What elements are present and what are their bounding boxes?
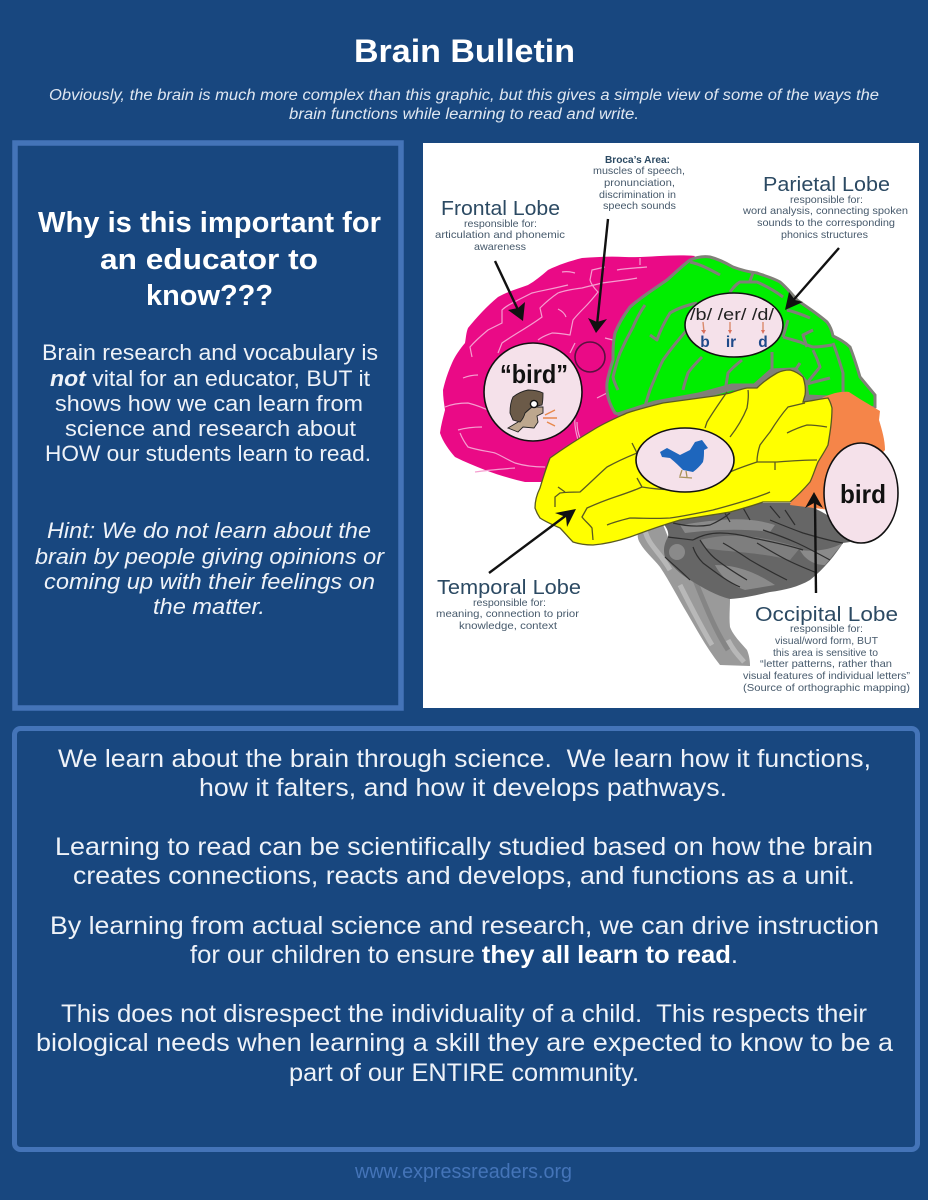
label: temporal lobe: Temporal Lobe (437, 577, 581, 599)
ellipse: written word bird: bird (840, 479, 886, 509)
subtitle: Obviously, the brain is much more complex than this graphic, but this gives a simple view of some of the ways the (49, 87, 879, 104)
label: occipital lobe: (Source of orthographic mapping) (743, 683, 910, 694)
label: occipital lobe: Occipital Lobe (755, 604, 898, 626)
label: Broca's area: discrimination in (599, 190, 676, 201)
ellipse: phonemes to graphemes (685, 293, 783, 357)
icon: speaking head (508, 390, 557, 432)
panel heading: know??? (146, 280, 273, 312)
subtitle (49, 87, 879, 123)
label: parietal lobe: responsible for: (790, 195, 863, 206)
hint text: brain by people giving opinions or (35, 544, 386, 569)
body text: shows how we can learn from (55, 391, 363, 416)
label: parietal lobe: sounds to the corresponding (757, 218, 895, 229)
panel heading (38, 207, 381, 312)
paragraph: how we learn about the brain: how it falters, and how it develops pathways. (199, 774, 727, 802)
paragraph: driving instruction: for our children to ensure they all learn to read. (190, 941, 738, 969)
arrow: temporal lobe (489, 509, 576, 573)
label: frontal lobe: articulation and phonemic (435, 230, 565, 241)
body text (42, 340, 378, 466)
circle: spoken word "bird" (484, 343, 582, 441)
label: occipital lobe: visual/word form, BUT (775, 636, 879, 647)
panel heading: Why is this important for (38, 207, 381, 239)
label: Broca's area: pronunciation, (604, 178, 675, 189)
label: Broca's area (593, 155, 685, 212)
paragraph: individuality: This does not disrespect the individuality of a child. This respects their (61, 1000, 867, 1028)
label: frontal lobe (435, 198, 565, 253)
label: frontal lobe: Frontal Lobe (441, 198, 560, 220)
paragraph: individuality (36, 1000, 893, 1087)
label: occipital lobe: “letter patterns, rather than (760, 659, 892, 670)
label: occipital lobe: visual features of individual letters” (743, 671, 911, 682)
ellipse: bird picture (636, 428, 734, 492)
body text: science and research about (65, 416, 356, 441)
panel: brain diagram (423, 143, 919, 708)
paragraph: individuality: part of our ENTIRE community. (289, 1059, 639, 1087)
label: frontal lobe: awareness (474, 242, 526, 253)
arrow: frontal lobe (495, 261, 525, 321)
ellipse: phonemes to graphemes: d (758, 334, 768, 351)
hint text: Hint: We do not learn about the (47, 518, 371, 543)
label: Broca's area: muscles of speech, (593, 166, 685, 177)
title: Brain Bulletin (354, 33, 575, 69)
paragraph: driving instruction: By learning from actual science and research, we can drive instruction (50, 912, 879, 940)
label: Broca's area: Broca’s Area: (605, 155, 670, 166)
label: temporal lobe: knowledge, context (459, 621, 557, 632)
panel heading: an educator to (100, 244, 318, 276)
label: parietal lobe: word analysis, connecting spoken (742, 206, 908, 217)
brain stem (638, 522, 750, 666)
frontal lobe (440, 255, 695, 482)
circle: spoken word "bird": “bird” (500, 359, 568, 389)
label: occipital lobe (743, 604, 911, 694)
paragraph: individuality: biological needs when learning a skill they are expected to know to be a (36, 1029, 893, 1057)
ellipse: phonemes to graphemes: b (700, 334, 710, 351)
body text: Brain research and vocabulary is (42, 340, 378, 365)
hint text: the matter. (153, 594, 265, 619)
paragraph: how we learn about the brain (58, 745, 871, 802)
subtitle: brain functions while learning to read and write. (289, 106, 639, 123)
paragraph: how we learn about the brain: We learn about the brain through science. We learn how it functions, (58, 745, 871, 773)
body text: not vital for an educator, BUT it (50, 366, 370, 391)
label: Broca's area: speech sounds (603, 201, 676, 212)
paragraph: driving instruction (50, 912, 879, 969)
temporal lobe (535, 370, 832, 545)
label: temporal lobe (436, 577, 581, 632)
label: parietal lobe: Parietal Lobe (763, 174, 890, 196)
label: occipital lobe: responsible for: (790, 624, 863, 635)
label: frontal lobe: responsible for: (464, 219, 537, 230)
paragraph: learning to read (55, 833, 873, 890)
arrow: parietal lobe (785, 248, 839, 310)
panel: why this is important (15, 143, 401, 708)
label: temporal lobe: responsible for: (473, 598, 546, 609)
paragraph: learning to read: creates connections, reacts and develops, and functions as a unit. (73, 862, 855, 890)
occipital lobe (790, 392, 885, 510)
icon: blue bird (660, 440, 708, 478)
panel: science of learning (14, 728, 918, 1150)
circle: Broca's area (575, 342, 605, 372)
label: temporal lobe: meaning, connection to prior (436, 609, 580, 620)
arrow: occipital lobe (805, 492, 823, 593)
ellipse: phonemes to graphemes: ir (726, 334, 736, 351)
label: parietal lobe (742, 174, 908, 241)
paragraph: learning to read: Learning to read can be scientifically studied based on how the brain (55, 833, 873, 861)
label: occipital lobe: this area is sensitive to (773, 648, 878, 659)
arrow: Broca's area (588, 219, 608, 333)
ellipse: written word bird (824, 443, 898, 543)
hint text (35, 518, 386, 619)
footer url: www.expressreaders.org (354, 1161, 572, 1183)
cerebellum (662, 503, 850, 599)
body text: HOW our students learn to read. (45, 441, 371, 466)
hint text: coming up with their feelings on (44, 569, 375, 594)
ellipse: phonemes to graphemes: /b/ /er/ /d/ (690, 306, 774, 324)
label: parietal lobe: phonics structures (781, 230, 868, 241)
parietal lobe (607, 257, 875, 425)
